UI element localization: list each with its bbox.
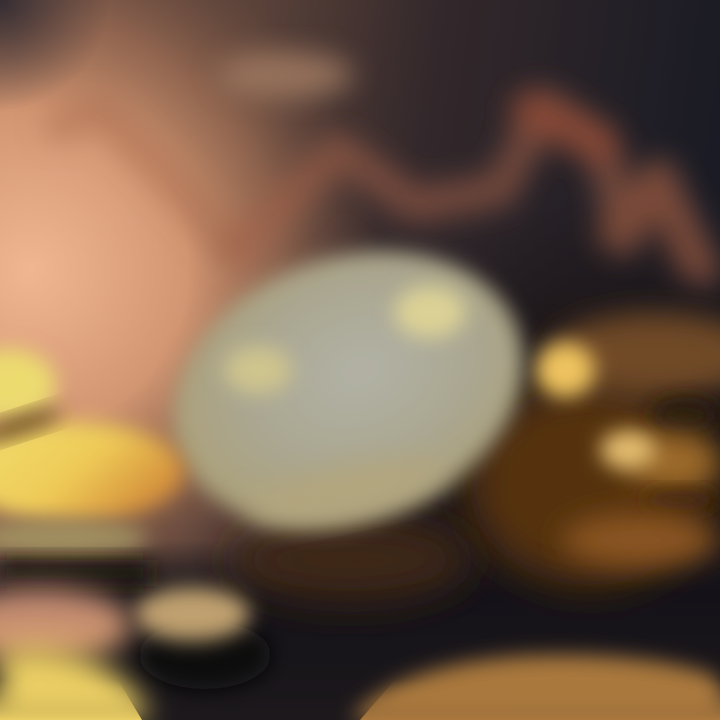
gold coin, bottom left (0, 587, 150, 720)
blurred chart label (217, 51, 353, 99)
shadow under silver coin (230, 518, 470, 602)
small coin on dark base (134, 587, 271, 689)
chart: blurred market line (60, 105, 705, 270)
large silver coin (134, 204, 562, 576)
stack of gold coins, right (470, 313, 720, 585)
gold coins, left (0, 349, 184, 586)
gold coin, bottom right (350, 655, 720, 720)
